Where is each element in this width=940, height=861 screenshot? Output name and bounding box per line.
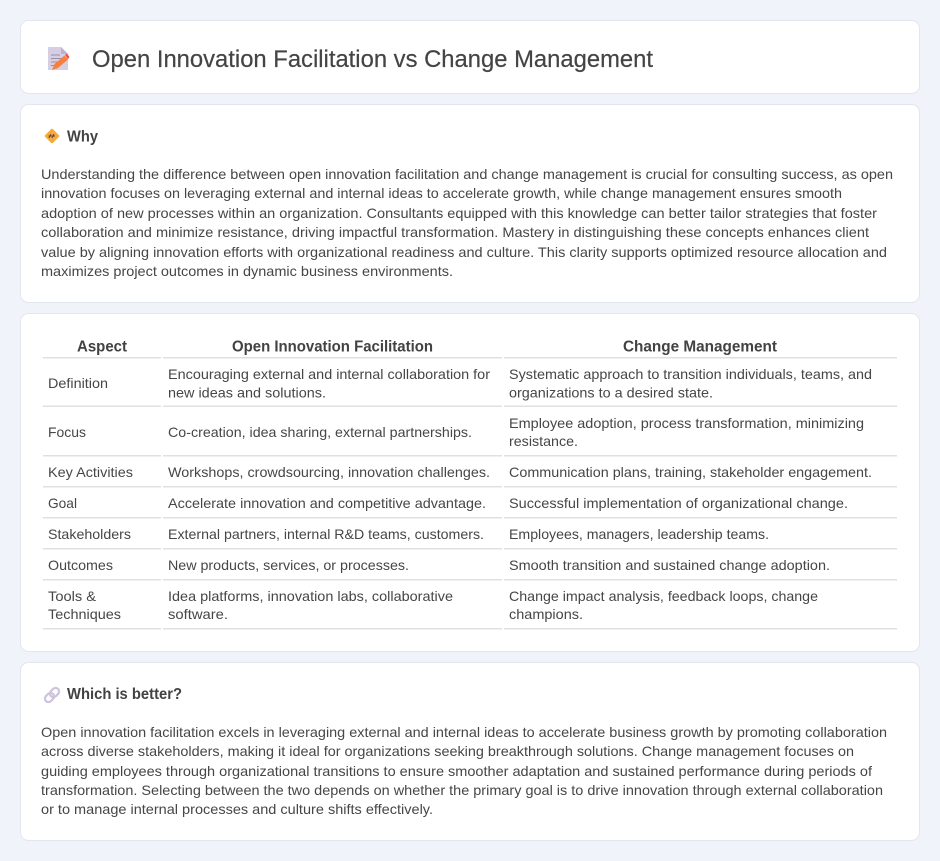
row: tools and techniques: Tools &: [48, 588, 97, 604]
text block: why: [41, 166, 893, 279]
row: stakeholders: External partners, internal R&D teams, customers.: [168, 526, 484, 542]
text block: which is better: across diverse stakeholders, making it ideal for organizations seeking breakthrough solutions. Change management focuses on: [41, 743, 854, 759]
row: goal: Accelerate innovation and competitive advantage.: [168, 495, 486, 511]
row: definition: Encouraging external and internal collaboration for: [168, 366, 490, 382]
icon: warning diamond: [44, 128, 60, 144]
row: key activities: [43, 464, 897, 488]
heading: why: Why: [67, 128, 98, 146]
row: focus: Focus: [48, 424, 86, 440]
icon: chain link: [43, 686, 61, 704]
text block: why: collaboration and minimize resistance, driving impactful transformation. Mastery in distinguishing these concepts enhances client: [41, 224, 869, 240]
row: outcomes: [43, 557, 897, 580]
row: goal: Successful implementation of organizational change.: [509, 495, 848, 511]
text block: why: innovation focuses on leveraging external and internal ideas to accelerate growth, while change management ensures smooth: [41, 185, 842, 201]
text block: which is better: or to manage internal processes and culture shifts effectively.: [41, 801, 433, 817]
row: outcomes: Smooth transition and sustained change adoption.: [509, 557, 830, 573]
heading: which is better: Which is better?: [67, 686, 182, 703]
row: focus: Co-creation, idea sharing, external partnerships.: [168, 424, 472, 440]
table header: Aspect: [77, 338, 128, 356]
table header: Open Innovation Facilitation: [232, 338, 433, 356]
row: key activities: Workshops, crowdsourcing, innovation challenges.: [168, 464, 490, 480]
row: tools and techniques: Idea platforms, innovation labs, collaborative: [168, 588, 453, 604]
row: outcomes: Outcomes: [48, 557, 113, 573]
row: tools and techniques: [43, 588, 897, 630]
row: focus: Employee adoption, process transformation, minimizing: [509, 415, 864, 431]
row: goal: Goal: [48, 495, 77, 511]
text block: which is better: guiding employees through organizational transitions to ensure smoother adaptation and sustained performance during periods of: [41, 763, 872, 779]
panel: why: [20, 104, 920, 302]
row: key activities: Communication plans, training, stakeholder engagement.: [509, 464, 872, 480]
row: stakeholders: Stakeholders: [48, 526, 131, 542]
row: outcomes: New products, services, or processes.: [168, 557, 409, 573]
panel: which is better: [20, 662, 920, 840]
title: Open Innovation Facilitation vs Change Management: [92, 46, 653, 73]
text block: which is better: transformation. Selecting between the two depends on whether the primary goal is to drive innovation through external collaboration: [41, 782, 883, 798]
text block: why: adoption of new processes within an organization. Consultants equipped with this knowledge can better tailor strategies that foster: [41, 205, 877, 221]
panel: header: [20, 20, 920, 94]
icon: document with pencil: [48, 47, 70, 70]
row: tools and techniques: software.: [168, 606, 228, 622]
text block: why: maximizes project outcomes in dynamic business environments.: [41, 263, 453, 279]
text block: why: Understanding the difference between open innovation facilitation and change management is crucial for consulting success, as open: [41, 166, 893, 182]
row: stakeholders: Employees, managers, leadership teams.: [509, 526, 769, 542]
row: definition: Systematic approach to transition individuals, teams, and: [509, 366, 872, 382]
row: tools and techniques: champions.: [509, 606, 583, 622]
row: key activities: Key Activities: [48, 464, 133, 480]
table header: Change Management: [623, 338, 778, 356]
row: definition: [43, 366, 897, 407]
row: definition: Definition: [48, 375, 108, 391]
text block: which is better: Open innovation facilitation excels in leveraging external and internal ideas to accelerate business growth by promoting collaboration: [41, 724, 887, 740]
row: definition: new ideas and solutions.: [168, 384, 326, 400]
row: tools and techniques: Techniques: [48, 606, 121, 622]
text block: which is better: [41, 724, 887, 817]
row: definition: organizations to a desired state.: [509, 384, 713, 400]
row: goal: [43, 495, 897, 518]
row: focus: [43, 415, 897, 456]
table header: [43, 338, 897, 358]
panel: comparison table: [20, 314, 920, 652]
row: focus: resistance.: [509, 433, 578, 449]
text block: why: value by aligning innovation efforts with organizational readiness and culture. This clarity supports optimized resource allocation and: [41, 244, 887, 260]
row: stakeholders: [43, 526, 897, 550]
row: tools and techniques: Change impact analysis, feedback loops, change: [509, 588, 818, 604]
